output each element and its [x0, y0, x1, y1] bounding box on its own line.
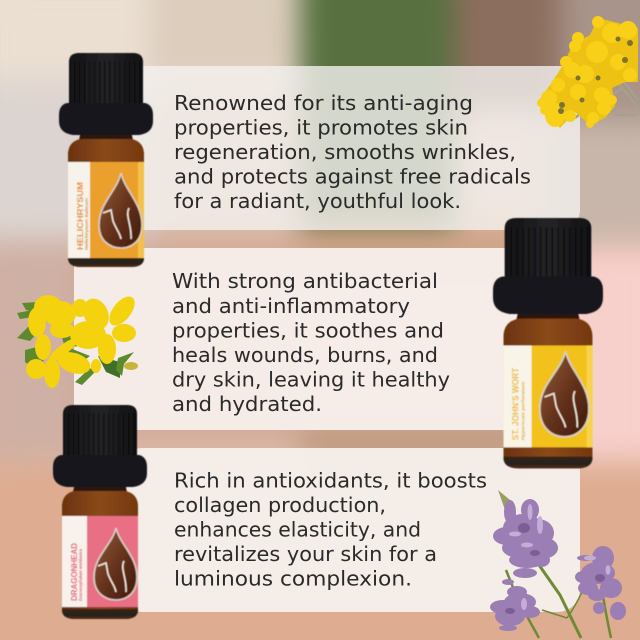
text block: dragonhead description: enhances elasticity, and — [174, 518, 421, 542]
bottle: st john's wort — [493, 218, 603, 468]
bottle: helichrysum: Helichrysum italicum — [84, 198, 89, 250]
icon: purple dragonhead flower spikes — [490, 490, 626, 638]
text block: dragonhead description — [174, 468, 487, 590]
bottle: st john's wort: Hypericum perforatum — [521, 381, 527, 440]
bottle: st john's wort: ST. JOHN'S WORT — [511, 367, 521, 440]
icon: yellow helichrysum flower cluster — [537, 16, 638, 128]
text block: helichrysum description: and protects against free radicals — [174, 164, 531, 188]
text block: dragonhead description: luminous complexion. — [174, 566, 412, 590]
text block: st john's wort description: With strong antibacterial — [172, 269, 438, 293]
bottle: helichrysum: HELICHRYSUM — [76, 182, 85, 250]
text block: st john's wort description: properties, it soothes and — [172, 318, 444, 342]
text block: helichrysum description: for a radiant, youthful look. — [174, 189, 461, 213]
text block: dragonhead description: Rich in antioxidants, it boosts — [174, 468, 487, 492]
bottle: dragonhead: Dracocephalum moldavica — [78, 549, 83, 601]
text block: st john's wort description: heals wounds, burns, and — [172, 343, 438, 367]
panel: st john's wort text card — [74, 248, 544, 430]
text block: helichrysum description: regeneration, smooths wrinkles, — [174, 140, 516, 164]
bottle: dragonhead — [53, 405, 147, 619]
text block: helichrysum description — [174, 91, 531, 213]
text block: st john's wort description — [172, 269, 450, 416]
panel: helichrysum text card — [118, 66, 580, 230]
text block: st john's wort description: and hydrated. — [172, 392, 322, 416]
icon: st john's wort yellow flowers — [17, 292, 140, 388]
panel: dragonhead text card — [120, 448, 580, 612]
text block: dragonhead description: revitalizes your skin for a — [174, 542, 437, 566]
text block: dragonhead description: collagen production, — [174, 493, 386, 517]
text block: helichrysum description: Renowned for its anti-aging — [174, 91, 473, 115]
bottle: dragonhead: DRAGONHEAD — [70, 543, 79, 601]
bottle: helichrysum — [59, 53, 153, 267]
text block: st john's wort description: and anti-inflammatory — [172, 294, 410, 318]
text block: st john's wort description: dry skin, leaving it healthy — [172, 368, 450, 392]
text block: helichrysum description: properties, it promotes skin — [174, 116, 468, 140]
